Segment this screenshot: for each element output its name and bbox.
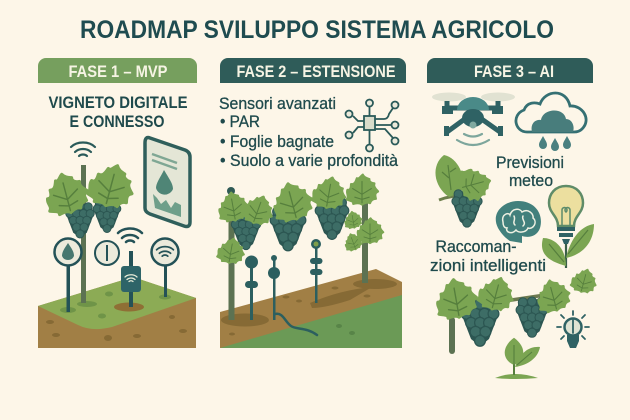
text: previsioni meteo [496,154,564,190]
header: fase 3 [427,58,593,83]
panel: fase 2 [216,58,406,348]
text: sensori avanzati [219,95,399,170]
text: raccomandazioni intelligenti: Raccoman- [436,238,516,256]
icon: sensor network [346,100,398,152]
icon: wifi data logger [118,228,142,307]
icon: drone [432,92,515,145]
text: sensori avanzati: • Foglie bagnate [220,133,334,151]
icon: sprout [495,338,540,379]
text: sensori avanzati: Sensori avanzati [219,95,336,113]
illustration: vines and grapes [216,175,383,320]
text: previsioni meteo: Previsioni [496,154,564,172]
icon: leaves with grapes [435,155,494,227]
icon: sensor gauge [95,241,119,265]
text: raccomandazioni intelligenti: zioni intelligenti [430,257,546,275]
text: sensori avanzati: • Suolo a varie profondità [220,152,399,170]
illustration: vine branch with grapes [434,267,599,351]
icon: smartphone [145,138,190,226]
icon: cloud with rain [516,93,586,151]
panel: fase 1 [38,58,197,348]
illustration: soil and grass [220,269,402,348]
illustration: vine with grapes [42,160,138,303]
text: raccomandazioni intelligenti [430,238,546,275]
header: fase 3: FASE 3 – AI [474,63,554,81]
header: fase 2 [220,58,406,83]
heading: vigneto digitale: VIGNETO DIGITALE [48,94,188,112]
text: sensori avanzati: • PAR [220,113,260,131]
header: fase 2: FASE 2 – ESTENSIONE [236,63,396,81]
panel: fase 3 [427,58,599,379]
icon: soil probes and cable [245,239,322,335]
illustration: ground block [38,277,196,348]
header: fase 1: FASE 1 – MVP [68,63,168,81]
heading: vigneto digitale: E CONNESSO [70,113,165,131]
icon: light bulb with leaves [542,186,594,268]
icon: wifi on vine pole [71,142,95,156]
icon: brain [496,201,541,243]
icon: sensor wifi [152,238,178,297]
heading: vigneto digitale [48,94,188,131]
text: previsioni meteo: meteo [509,172,553,190]
icon: sensor drop [54,238,82,312]
header: fase 1 [38,58,197,83]
title: ROADMAP SVILUPPO SISTEMA AGRICOLO [80,16,554,44]
icon: small idea bulb [557,311,589,348]
